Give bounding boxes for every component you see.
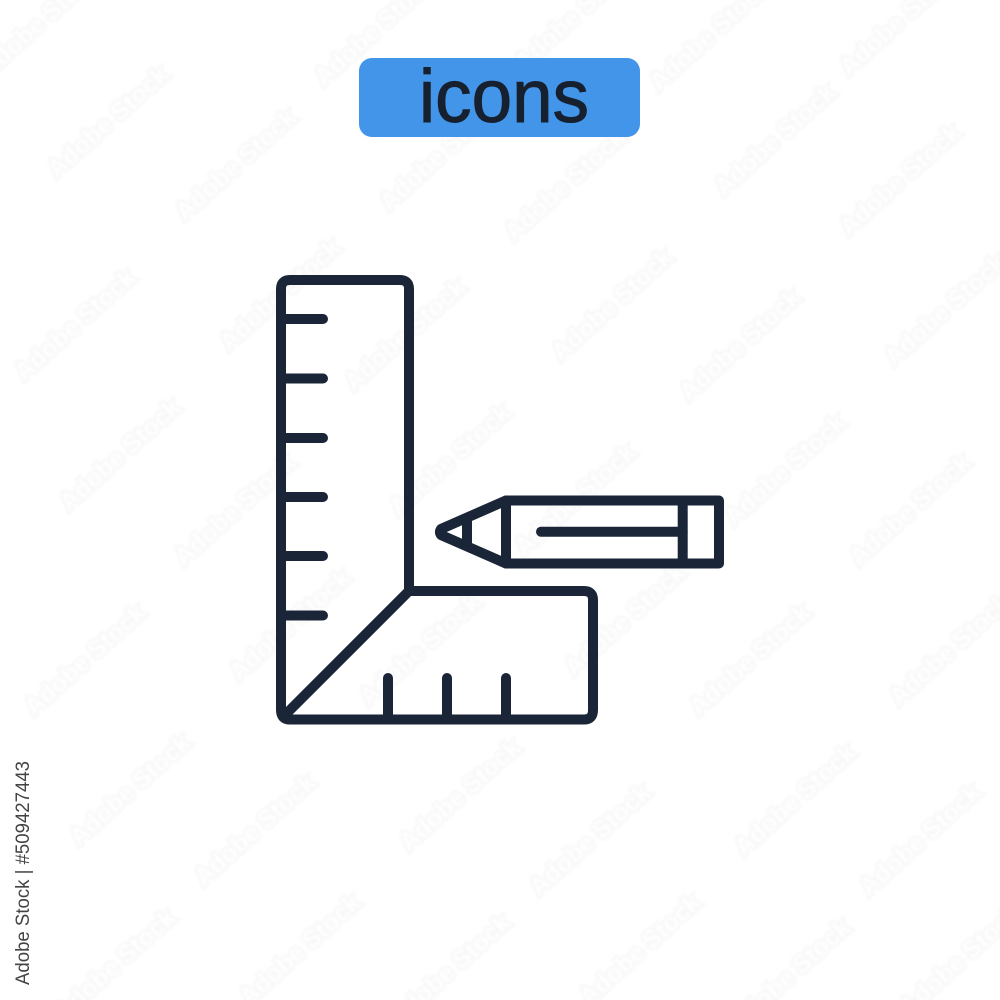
watermark pattern: Adobe Stock bbox=[499, 123, 631, 247]
watermark pattern: Adobe Stock bbox=[9, 263, 141, 387]
watermark pattern: Adobe Stock bbox=[546, 243, 678, 367]
watermark pattern: Adobe Stock bbox=[224, 563, 356, 687]
watermark pattern: Adobe Stock bbox=[384, 398, 516, 522]
watermark pattern: Adobe Stock bbox=[674, 283, 806, 407]
watermark pattern: Adobe Stock bbox=[394, 733, 526, 857]
watermark pattern: Adobe Stock bbox=[169, 448, 301, 572]
watermark pattern: Adobe Stock bbox=[709, 78, 841, 202]
watermark pattern: Adobe Stock bbox=[42, 60, 174, 184]
watermark pattern: Adobe Stock bbox=[509, 438, 641, 562]
watermark pattern: Adobe Stock bbox=[354, 588, 486, 712]
watermark pattern: Adobe Stock bbox=[19, 598, 151, 722]
side credit text: Adobe Stock | #509427443 bbox=[13, 761, 34, 985]
watermark pattern: Adobe Stock bbox=[189, 768, 321, 892]
watermark pattern: Adobe Stock bbox=[834, 118, 966, 242]
title badge: icons bbox=[419, 54, 589, 138]
watermark pattern: Adobe Stock bbox=[374, 93, 506, 217]
watermark pattern: Adobe Stock bbox=[524, 778, 656, 902]
watermark pattern: Adobe Stock bbox=[54, 393, 186, 517]
watermark pattern: Adobe Stock bbox=[170, 103, 302, 227]
watermark pattern: Adobe Stock bbox=[214, 233, 346, 357]
watermark pattern: Adobe Stock bbox=[64, 728, 196, 852]
icon: pencil bbox=[440, 500, 719, 564]
watermark pattern: Adobe Stock bbox=[719, 408, 851, 532]
watermark pattern: Adobe Stock bbox=[559, 558, 691, 682]
icon: set square ruler bbox=[281, 280, 593, 720]
watermark pattern: Adobe Stock bbox=[729, 738, 861, 862]
watermark pattern: Adobe Stock bbox=[854, 778, 986, 902]
title badge bbox=[359, 54, 640, 138]
watermark pattern: Adobe Stock bbox=[339, 273, 471, 397]
watermark pattern: Adobe Stock bbox=[844, 448, 976, 572]
watermark pattern: Adobe Stock bbox=[684, 598, 816, 722]
